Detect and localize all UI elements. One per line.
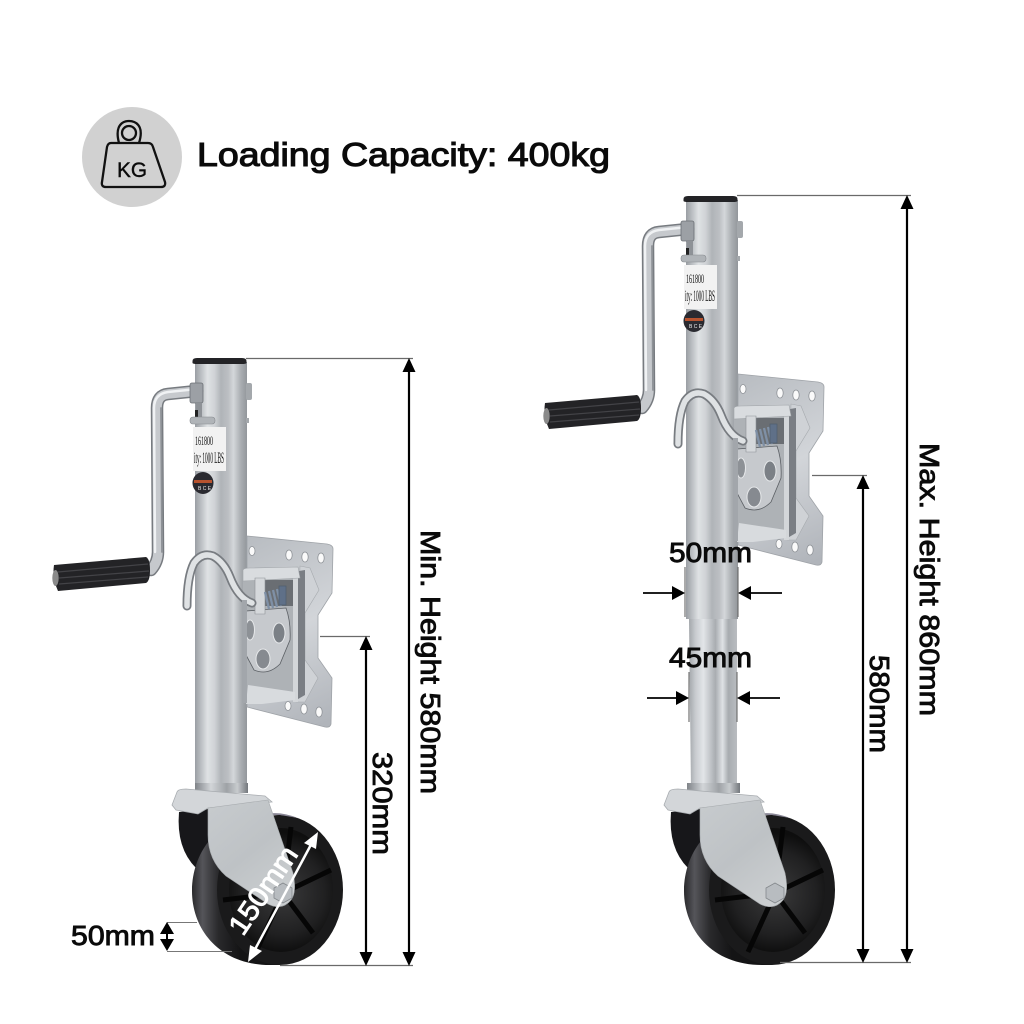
inner tube xyxy=(689,619,737,790)
dimension: left jack 320mm xyxy=(320,636,398,966)
icon background circle xyxy=(82,107,182,207)
dimension: left jack 320mm: 320mm xyxy=(367,752,398,855)
dimension: left jack min height 580mm xyxy=(246,358,446,966)
jack upper xyxy=(52,358,333,727)
jack upper xyxy=(543,196,824,565)
right jack: maximum height xyxy=(543,196,835,965)
dimension: outer tube 50mm xyxy=(643,537,782,617)
main tube xyxy=(195,362,247,787)
dimension: wheel diameter 150mm xyxy=(222,832,318,962)
dimension: right jack max height 860mm: Max. Height 860mm xyxy=(914,443,945,716)
caster xyxy=(664,783,835,965)
dimension: wheel width 50mm: 50mm xyxy=(71,920,155,951)
outer tube xyxy=(686,200,738,619)
dimension: right jack max height 860mm xyxy=(737,195,945,963)
dimension: right jack 580mm: 580mm xyxy=(864,655,895,753)
dimension: right jack 580mm xyxy=(812,475,895,963)
dimension: left jack min height 580mm: Min. Height 580mm xyxy=(415,530,446,794)
dimension: inner tube 45mm: 45mm xyxy=(669,642,752,673)
dimension: wheel width 50mm xyxy=(71,920,232,952)
heading: loading capacity: Loading Capacity: 400kg xyxy=(197,136,610,173)
left jack: minimum height xyxy=(52,358,343,965)
dimension: inner tube 45mm xyxy=(647,642,780,722)
kettlebell outline xyxy=(102,121,165,187)
KG letters: KG xyxy=(117,159,147,182)
weight icon xyxy=(82,107,182,207)
dimension: wheel diameter 150mm: 150mm xyxy=(222,840,304,940)
dimension: outer tube 50mm: 50mm xyxy=(669,537,752,568)
caster xyxy=(172,783,343,965)
